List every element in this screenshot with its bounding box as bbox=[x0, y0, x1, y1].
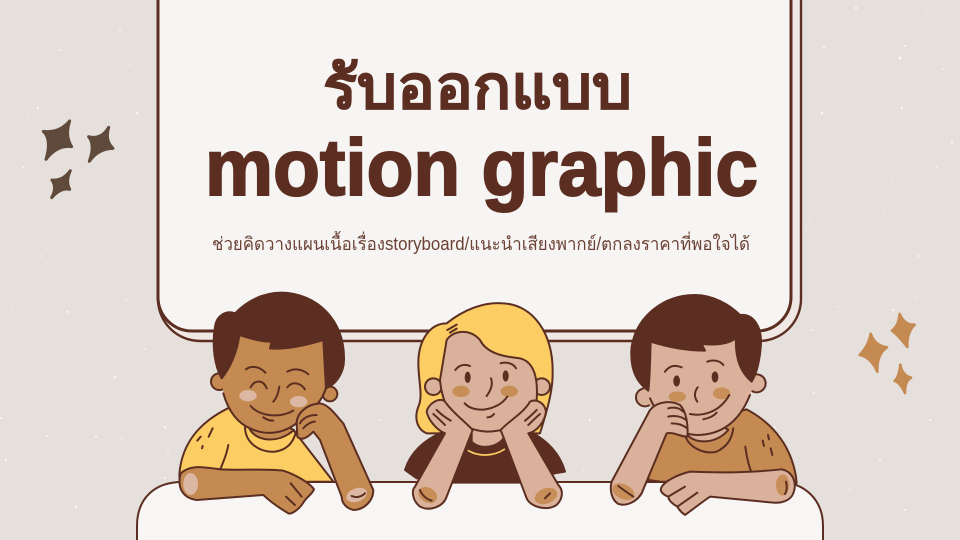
character: girl with blonde hair bbox=[405, 303, 565, 509]
character: boy with yellow shirt bbox=[179, 293, 373, 514]
panel: front board bbox=[158, 0, 791, 331]
panel: back board bbox=[158, 0, 801, 341]
character: boy with brown shirt bbox=[610, 295, 797, 515]
subtitle: ช่วยคิดวางแผนเนื้อเรื่องstoryboard/แนะนำเสียงพากย์/ตกลงราคาที่พอใจได้ bbox=[212, 231, 750, 254]
title: thai heading: รับออกแบบ bbox=[323, 54, 632, 121]
table bbox=[137, 482, 823, 540]
title: motion graphic: motion graphic bbox=[205, 123, 758, 212]
icon: dark sparkles bbox=[43, 121, 113, 198]
icon: orange sparkles bbox=[860, 314, 915, 393]
